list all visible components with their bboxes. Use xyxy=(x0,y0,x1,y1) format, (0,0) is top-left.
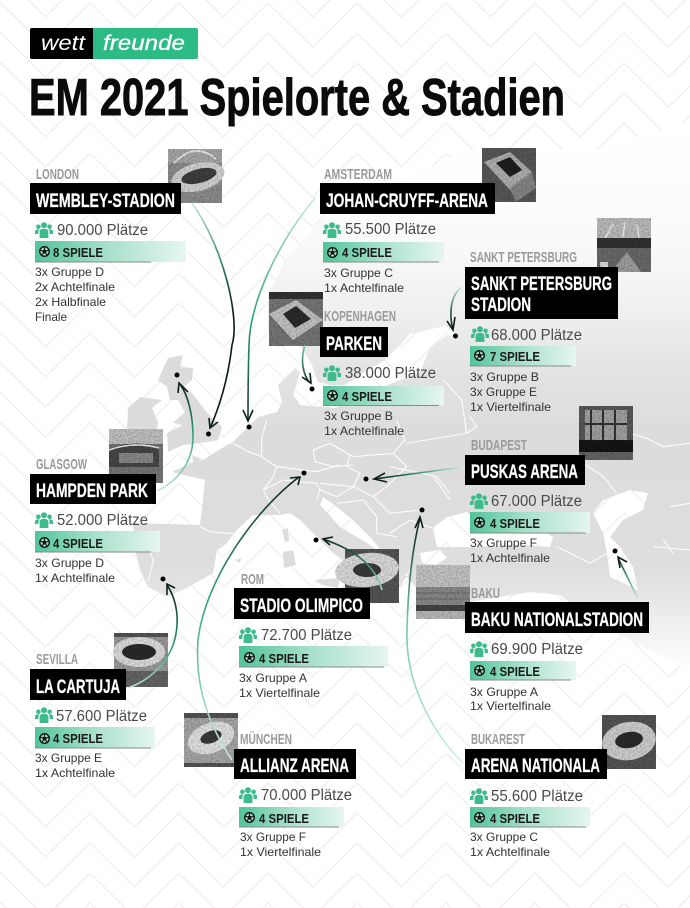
panel: London xyxy=(30,166,186,324)
panel: Budapest: 1x Achtelfinale xyxy=(470,551,550,565)
panel: Rom xyxy=(234,571,388,700)
photo: Kopenhagen xyxy=(269,292,323,346)
panel: London: LONDON xyxy=(36,166,79,183)
panel: Sevilla: LA CARTUJA xyxy=(36,676,120,698)
panel: München xyxy=(234,731,356,859)
panel: Amsterdam: 55.500 Plätze xyxy=(345,221,436,238)
panel: London: 2x Achtelfinale xyxy=(35,280,115,294)
panel: Budapest: 3x Gruppe F xyxy=(470,536,537,550)
arrow: Baku xyxy=(612,548,638,599)
panel: London: Finale xyxy=(35,310,67,324)
panel: München: 3x Gruppe F xyxy=(240,830,306,844)
panel: Budapest: PUSKAS ARENA xyxy=(471,461,578,483)
panel: Glasgow: 4 SPIELE xyxy=(53,536,103,551)
panel: Bukarest: 4 SPIELE xyxy=(490,811,540,826)
panel: Glasgow: 52.000 Plätze xyxy=(57,512,148,529)
photo: Baku xyxy=(416,565,470,619)
photo: Glasgow xyxy=(109,429,163,483)
photo: St Petersburg xyxy=(597,218,651,272)
panel: Rom: ROM xyxy=(241,571,264,588)
arrow: St Petersburg xyxy=(447,287,462,338)
ireland xyxy=(127,397,162,432)
panel: München: 70.000 Plätze xyxy=(261,787,352,804)
panel: Sankt Petersburg: STADION xyxy=(471,294,531,316)
panel: Sankt Petersburg: 3x Gruppe B xyxy=(470,370,539,384)
panel: Kopenhagen: 1x Achtelfinale xyxy=(324,424,404,438)
panel: Glasgow xyxy=(30,456,160,585)
panel: Baku: 69.900 Plätze xyxy=(491,641,583,658)
panel: Rom: 72.700 Plätze xyxy=(261,627,352,644)
panel: München: ALLIANZ ARENA xyxy=(240,755,349,777)
photo: Rom xyxy=(333,549,401,603)
panel: Sevilla: 57.600 Plätze xyxy=(56,708,147,725)
panel: Kopenhagen: PARKEN xyxy=(326,333,382,355)
arrow: Bukarest xyxy=(407,508,463,763)
photo: Bukarest xyxy=(599,715,659,769)
mediterranean islands xyxy=(235,528,340,588)
logo xyxy=(30,28,198,59)
panel: London: WEMBLEY-STADION xyxy=(36,190,175,212)
great britain xyxy=(158,355,222,452)
panel: Budapest: 67.000 Plätze xyxy=(491,493,582,510)
panel: Sevilla xyxy=(30,651,155,780)
arrow: Budapest xyxy=(364,467,463,482)
panel: Amsterdam xyxy=(320,166,495,295)
panel: Glasgow: 1x Achtelfinale xyxy=(35,571,115,585)
panel: Sevilla: 1x Achtelfinale xyxy=(35,766,115,780)
arrow: Kopenhagen xyxy=(302,345,314,392)
photo: Sevilla xyxy=(113,633,168,687)
panel: Sankt Petersburg: 1x Viertelfinale xyxy=(470,400,551,414)
panel: München: 4 SPIELE xyxy=(259,811,309,826)
panel: Sevilla: 4 SPIELE xyxy=(53,731,103,746)
panel: Kopenhagen: KOPENHAGEN xyxy=(324,308,396,325)
arrow: Rom xyxy=(314,537,382,590)
panel: Glasgow: HAMPDEN PARK xyxy=(36,480,148,502)
panel: London: 8 SPIELE xyxy=(53,245,103,260)
panel: Amsterdam: AMSTERDAM xyxy=(324,166,392,183)
arrow: Amsterdam xyxy=(243,198,315,430)
panel: Baku: BAKU xyxy=(471,585,500,602)
panel: London: 2x Halbfinale xyxy=(35,295,106,309)
panel: Amsterdam: 1x Achtelfinale xyxy=(324,281,404,295)
photo: Wembley xyxy=(168,149,228,203)
panel: Budapest xyxy=(465,437,590,565)
panel: Kopenhagen xyxy=(320,308,444,438)
panel: London: 3x Gruppe D xyxy=(35,265,104,279)
panel: Amsterdam: JOHAN-CRUYFF-ARENA xyxy=(326,190,488,212)
photo: München xyxy=(183,713,239,767)
panel: Sevilla: 3x Gruppe E xyxy=(35,751,102,765)
arrow: München xyxy=(197,470,306,760)
panel: Sankt Petersburg: 68.000 Plätze xyxy=(491,327,582,344)
panel: Rom: 1x Viertelfinale xyxy=(239,686,320,700)
panel: Sankt Petersburg: 3x Gruppe E xyxy=(470,385,537,399)
panel: Sankt Petersburg: SANKT PETERSBURG xyxy=(471,273,612,295)
panel: Bukarest xyxy=(465,731,607,859)
panel: Baku: 1x Viertelfinale xyxy=(470,699,551,713)
panel: Kopenhagen: 38.000 Plätze xyxy=(345,365,436,382)
panel: Sevilla: SEVILLA xyxy=(36,651,78,668)
photo: Amsterdam xyxy=(482,148,536,202)
panel: Kopenhagen: 4 SPIELE xyxy=(342,389,392,404)
panel: Budapest: BUDAPEST xyxy=(471,437,527,454)
arrow: London xyxy=(192,203,234,436)
logo: wett xyxy=(41,32,86,55)
panel: Kopenhagen: 3x Gruppe B xyxy=(324,409,393,423)
panel: Rom: 4 SPIELE xyxy=(259,651,309,666)
panel: Sankt Petersburg: 7 SPIELE xyxy=(490,349,540,364)
panel: Rom: 3x Gruppe A xyxy=(239,671,307,685)
panel: Glasgow: 3x Gruppe D xyxy=(35,556,104,570)
photo: Budapest xyxy=(579,406,633,460)
panel: Bukarest: 55.600 Plätze xyxy=(491,788,583,805)
panel: Baku: 3x Gruppe A xyxy=(470,685,538,699)
panel: Amsterdam: 4 SPIELE xyxy=(342,245,392,260)
panel: Glasgow: GLASGOW xyxy=(36,456,88,473)
arrow: Glasgow xyxy=(157,372,193,491)
panel: Sankt Petersburg: SANKT PETERSBURG xyxy=(470,249,577,266)
panel: Amsterdam: 3x Gruppe C xyxy=(324,266,393,280)
country borders xyxy=(137,420,420,582)
arrow: Sevilla xyxy=(128,576,177,688)
panel: Bukarest: 1x Achtelfinale xyxy=(470,845,550,859)
logo: freunde xyxy=(103,32,185,55)
panel: München: MÜNCHEN xyxy=(240,731,292,748)
panel: Bukarest: 3x Gruppe C xyxy=(470,830,538,844)
map of Europe xyxy=(127,120,690,670)
panel: Baku xyxy=(465,585,649,713)
panel: München: 1x Viertelfinale xyxy=(240,845,321,859)
panel: Budapest: 4 SPIELE xyxy=(490,516,540,531)
panel: Sankt Petersburg xyxy=(465,249,618,414)
panel: Bukarest: ARENA NATIONALA xyxy=(471,755,600,777)
panel: Rom: STADIO OLIMPICO xyxy=(240,595,363,617)
panel: Bukarest: BUKAREST xyxy=(471,731,525,748)
panel: Baku: 4 SPIELE xyxy=(490,664,540,679)
panel: London: 90.000 Plätze xyxy=(57,222,148,239)
